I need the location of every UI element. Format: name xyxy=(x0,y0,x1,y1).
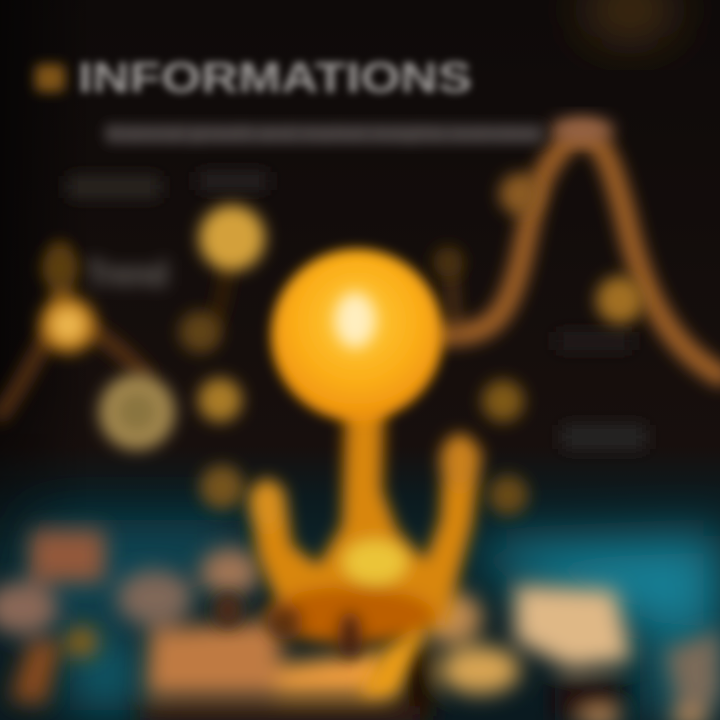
coin: far right xyxy=(488,475,528,515)
splash stem xyxy=(248,400,482,625)
coin: chart 3 xyxy=(433,247,463,277)
central sun orb xyxy=(271,249,443,421)
coin: dim xyxy=(179,311,221,353)
shadow: central xyxy=(405,645,433,720)
block: centre left xyxy=(146,620,285,695)
block: centre xyxy=(275,650,392,695)
bottom shadow xyxy=(140,705,420,720)
coin: lower xyxy=(200,465,244,509)
line chart wave xyxy=(0,137,720,415)
coin: lightbulb left xyxy=(40,297,96,353)
coin: top xyxy=(199,205,265,271)
warm top glow xyxy=(585,0,675,40)
stack: far right xyxy=(665,630,720,720)
dark drips xyxy=(214,592,242,628)
splash highlight xyxy=(343,540,407,584)
icon: title bullet xyxy=(35,64,65,92)
stack: right cream xyxy=(515,585,632,668)
stack: far left xyxy=(0,582,58,634)
label: upper left xyxy=(68,176,160,198)
coin: right xyxy=(482,380,524,422)
label: upper centre xyxy=(198,172,268,190)
chart peak highlight xyxy=(550,117,614,143)
orb inner glow xyxy=(335,292,375,348)
item: orange coin left xyxy=(67,627,97,657)
coin: chart 2 xyxy=(596,276,644,324)
stack: left column xyxy=(10,640,62,705)
splash pool xyxy=(265,587,435,643)
label: left: Trend xyxy=(86,253,168,294)
teal table surface xyxy=(20,520,720,720)
coin: large pale xyxy=(99,374,175,450)
label: right upper xyxy=(556,332,632,350)
stack: left top xyxy=(30,530,105,582)
stack: left mid xyxy=(117,570,193,626)
liquid splash xyxy=(214,400,482,695)
label: right lower xyxy=(562,425,646,449)
small labels xyxy=(68,172,646,449)
stream drip xyxy=(360,625,430,695)
coin: chart 1 xyxy=(499,173,541,215)
coin: small xyxy=(198,378,242,422)
subtitle: financial growth and market insights overview xyxy=(105,123,536,145)
title: INFORMATIONS xyxy=(78,54,472,102)
coin: bulb top left xyxy=(42,248,78,288)
splash tip: left xyxy=(249,479,285,531)
coin: right table xyxy=(440,646,520,694)
table items: bars and coins xyxy=(0,530,720,720)
splash tip: right xyxy=(440,434,480,490)
floating coins xyxy=(40,173,644,515)
shadow: lower right xyxy=(555,680,620,720)
